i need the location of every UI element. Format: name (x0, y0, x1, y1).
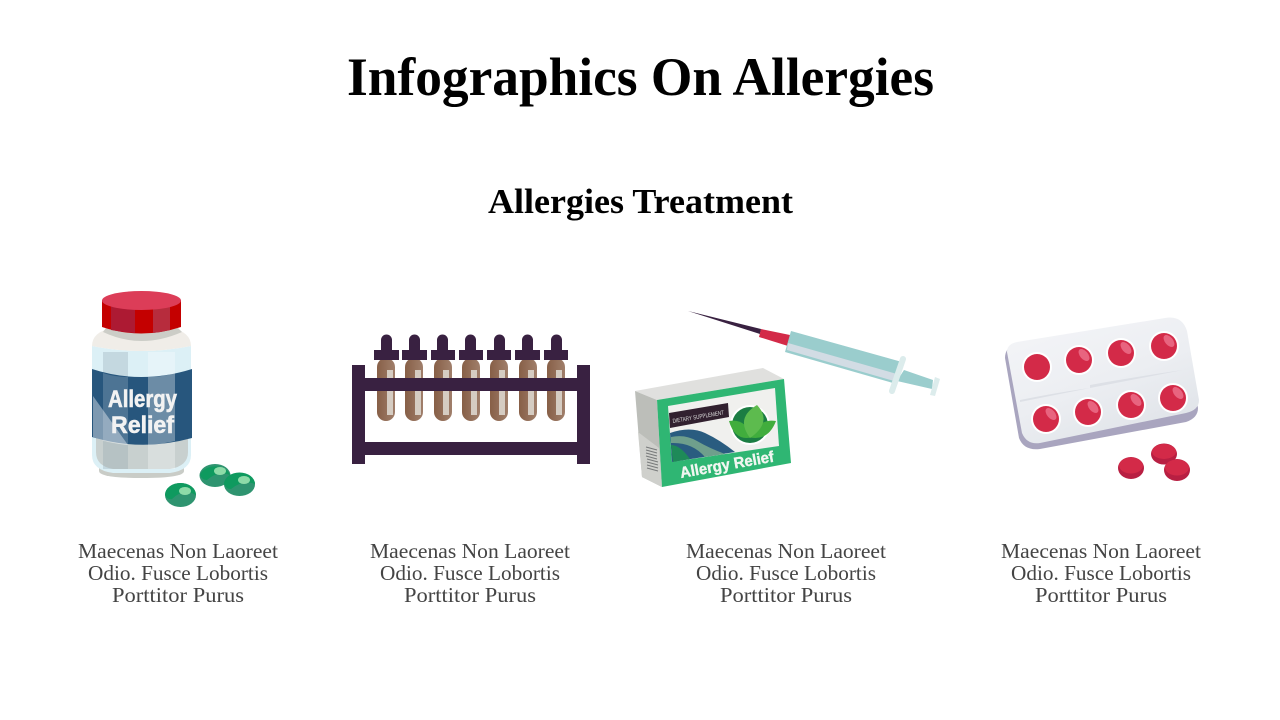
icon: blister pack with red tablets (1005, 318, 1199, 481)
icon: test tube rack (352, 334, 590, 464)
loose tablets (1118, 444, 1190, 481)
caption: bottle: Maecenas Non Laoreet (78, 539, 278, 563)
subtitle: Allergies Treatment (488, 182, 793, 221)
caption: bottle: Odio. Fusce Lobortis (88, 561, 268, 585)
dietary label (669, 403, 729, 428)
caption: blister pack: Porttitor Purus (1035, 583, 1167, 607)
caption: syringe and box: Odio. Fusce Lobortis (696, 561, 876, 585)
caption: syringe and box: Porttitor Purus (720, 583, 852, 607)
bottle glass (92, 346, 191, 473)
caption: test tubes: Maecenas Non Laoreet (370, 539, 570, 563)
title: Infographics On Allergies (347, 47, 934, 107)
caption: bottle (78, 539, 278, 607)
caption: test tubes: Odio. Fusce Lobortis (380, 561, 560, 585)
bottle label: Allergy (108, 386, 178, 413)
caption: bottle: Porttitor Purus (112, 583, 244, 607)
blister sheet (1007, 318, 1199, 443)
blister shadow (1005, 321, 1198, 449)
test tubes (377, 358, 565, 421)
barcode (646, 447, 658, 471)
bottle label: Relief (111, 412, 175, 439)
leaf emblem (729, 405, 776, 445)
caption: test tubes: Porttitor Purus (404, 583, 536, 607)
bottle base (99, 462, 184, 478)
bottle label (92, 369, 192, 445)
caption: blister pack: Odio. Fusce Lobortis (1011, 561, 1191, 585)
caption: syringe and box (686, 539, 886, 607)
dietary label: DIETARY SUPPLEMENT (672, 410, 725, 425)
bottle shoulder (92, 328, 191, 351)
green pills (165, 464, 255, 507)
rack frame (352, 365, 590, 464)
tube stoppers (374, 334, 568, 360)
icon: syringe (688, 311, 940, 396)
caption: blister pack (1001, 539, 1201, 607)
box brand text: Allergy Relief (679, 449, 776, 482)
caption: syringe and box: Maecenas Non Laoreet (686, 539, 886, 563)
box waves (670, 430, 735, 462)
caption: test tubes (370, 539, 570, 607)
icon: supplement box (635, 368, 791, 487)
bottle cap (102, 291, 181, 334)
caption: blister pack: Maecenas Non Laoreet (1001, 539, 1201, 563)
icon: medicine bottle with green pills (92, 291, 255, 507)
blister tablets (1022, 331, 1188, 434)
